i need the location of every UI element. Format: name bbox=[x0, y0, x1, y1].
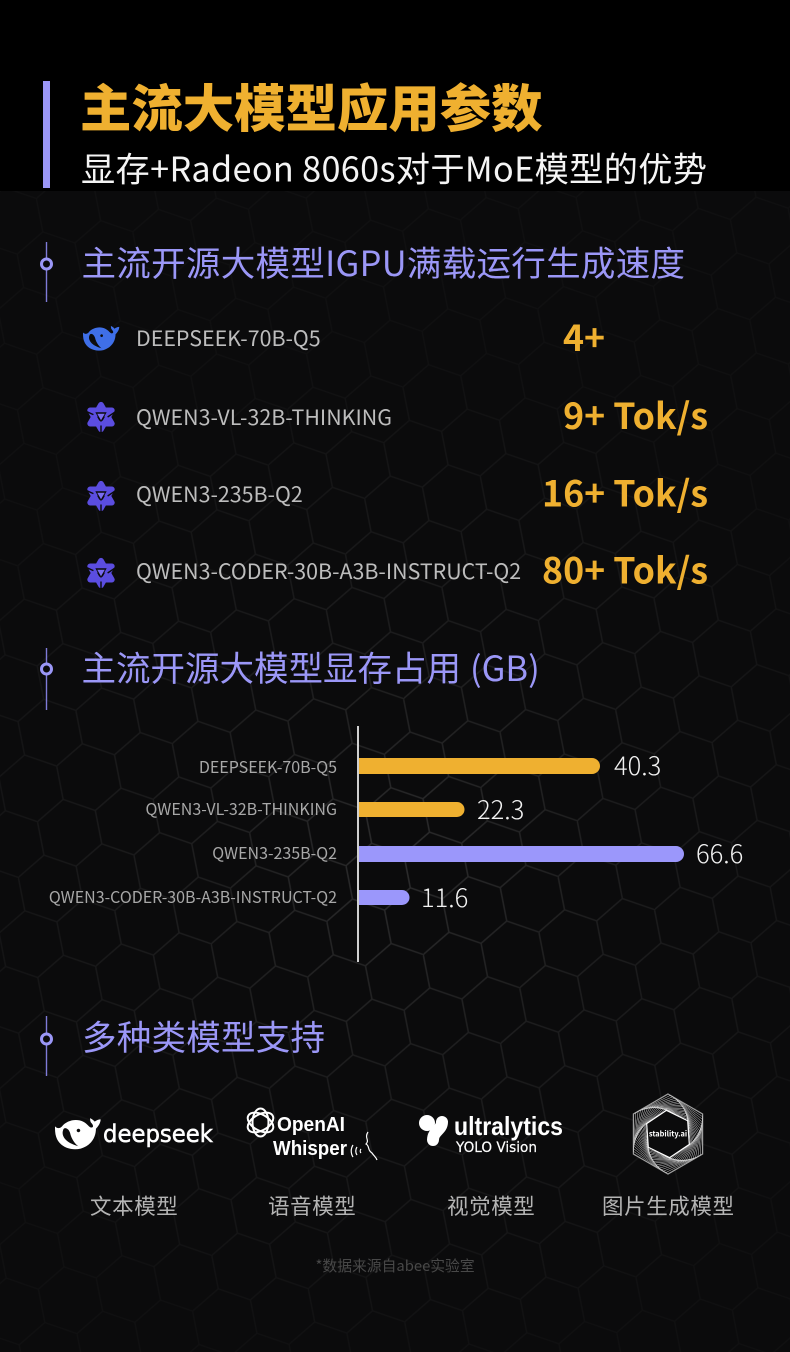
bar chart bbox=[49, 726, 743, 962]
logo: ultralytics yolo bbox=[419, 1111, 563, 1156]
icon: blue whale bbox=[83, 326, 119, 351]
bar: deepseek: 40.3 bbox=[614, 746, 661, 783]
speed value: 4+ bbox=[563, 311, 605, 362]
bar: qwen vl: QWEN3-VL-32B-THINKING bbox=[146, 796, 337, 820]
icon: qwen star bbox=[86, 484, 116, 512]
row: qwen coder speed bbox=[86, 544, 708, 594]
subtitle: 显存+Radeon 8060s对于MoE模型的优势 bbox=[81, 142, 707, 192]
speed value: 16+ Tok/s bbox=[542, 466, 708, 518]
logo: openai whisper bbox=[244, 1108, 377, 1160]
section marker bbox=[42, 1016, 52, 1076]
model name: QWEN3-CODER-30B-A3B-INSTRUCT-Q2 bbox=[136, 555, 521, 586]
row: qwen 235b speed bbox=[86, 466, 708, 518]
model name: QWEN3-VL-32B-THINKING bbox=[136, 401, 392, 432]
bar: deepseek bbox=[199, 746, 661, 783]
bar: qwen 235b bbox=[212, 834, 743, 871]
panel: memory usage bbox=[42, 641, 743, 962]
bar: qwen coder: 11.6 bbox=[421, 878, 468, 915]
row: qwen vl speed bbox=[86, 389, 708, 440]
logo: openai whisper: Whisper bbox=[273, 1138, 347, 1160]
caption: text model: 文本模型 bbox=[90, 1190, 178, 1221]
bar: deepseek: DEEPSEEK-70B-Q5 bbox=[199, 754, 337, 778]
logo: deepseek: deepseek bbox=[103, 1120, 213, 1148]
caption: image model: 图片生成模型 bbox=[602, 1190, 735, 1221]
model name: QWEN3-235B-Q2 bbox=[136, 478, 303, 509]
title: 主流大模型应用参数 bbox=[80, 67, 543, 142]
bar: qwen 235b: 66.6 bbox=[696, 834, 743, 871]
section heading: speed: 主流开源大模型IGPU满载运行生成速度 bbox=[82, 236, 685, 286]
row: deepseek speed bbox=[83, 311, 605, 362]
bar: qwen vl bbox=[146, 790, 524, 827]
header block bbox=[43, 67, 707, 192]
caption: vision model: 视觉模型 bbox=[447, 1190, 535, 1221]
logo: stability.ai: stability.ai bbox=[649, 1128, 687, 1140]
logo: stability.ai bbox=[630, 1093, 706, 1175]
bar: qwen 235b: QWEN3-235B-Q2 bbox=[212, 840, 337, 864]
section marker bbox=[42, 648, 52, 710]
panel: model types bbox=[42, 1010, 735, 1221]
section heading: memory: 主流开源大模型显存占用 (GB) bbox=[82, 641, 540, 691]
icon: qwen star bbox=[86, 405, 116, 433]
axis bbox=[357, 726, 359, 962]
speed value: 9+ Tok/s bbox=[563, 389, 708, 440]
section heading: types: 多种类模型支持 bbox=[82, 1010, 325, 1060]
model name: DEEPSEEK-70B-Q5 bbox=[136, 322, 321, 353]
logo: openai whisper: OpenAI bbox=[277, 1114, 345, 1136]
bar: qwen coder bbox=[49, 878, 468, 915]
section marker bbox=[42, 242, 52, 302]
bar: qwen coder: QWEN3-CODER-30B-A3B-INSTRUCT-Q2 bbox=[49, 884, 337, 908]
logo: deepseek bbox=[55, 1118, 213, 1149]
bar: qwen vl: 22.3 bbox=[477, 790, 524, 827]
panel: generation speed bbox=[42, 236, 708, 594]
caption: speech model: 语音模型 bbox=[268, 1190, 356, 1221]
footnote: *数据来源自abee实验室 bbox=[316, 1255, 475, 1276]
logo: ultralytics yolo: ultralytics bbox=[454, 1111, 563, 1141]
speed value: 80+ Tok/s bbox=[542, 544, 708, 594]
icon: qwen star bbox=[86, 561, 116, 589]
logo: ultralytics yolo: YOLO Vision bbox=[455, 1140, 537, 1156]
header accent bar bbox=[43, 81, 50, 188]
